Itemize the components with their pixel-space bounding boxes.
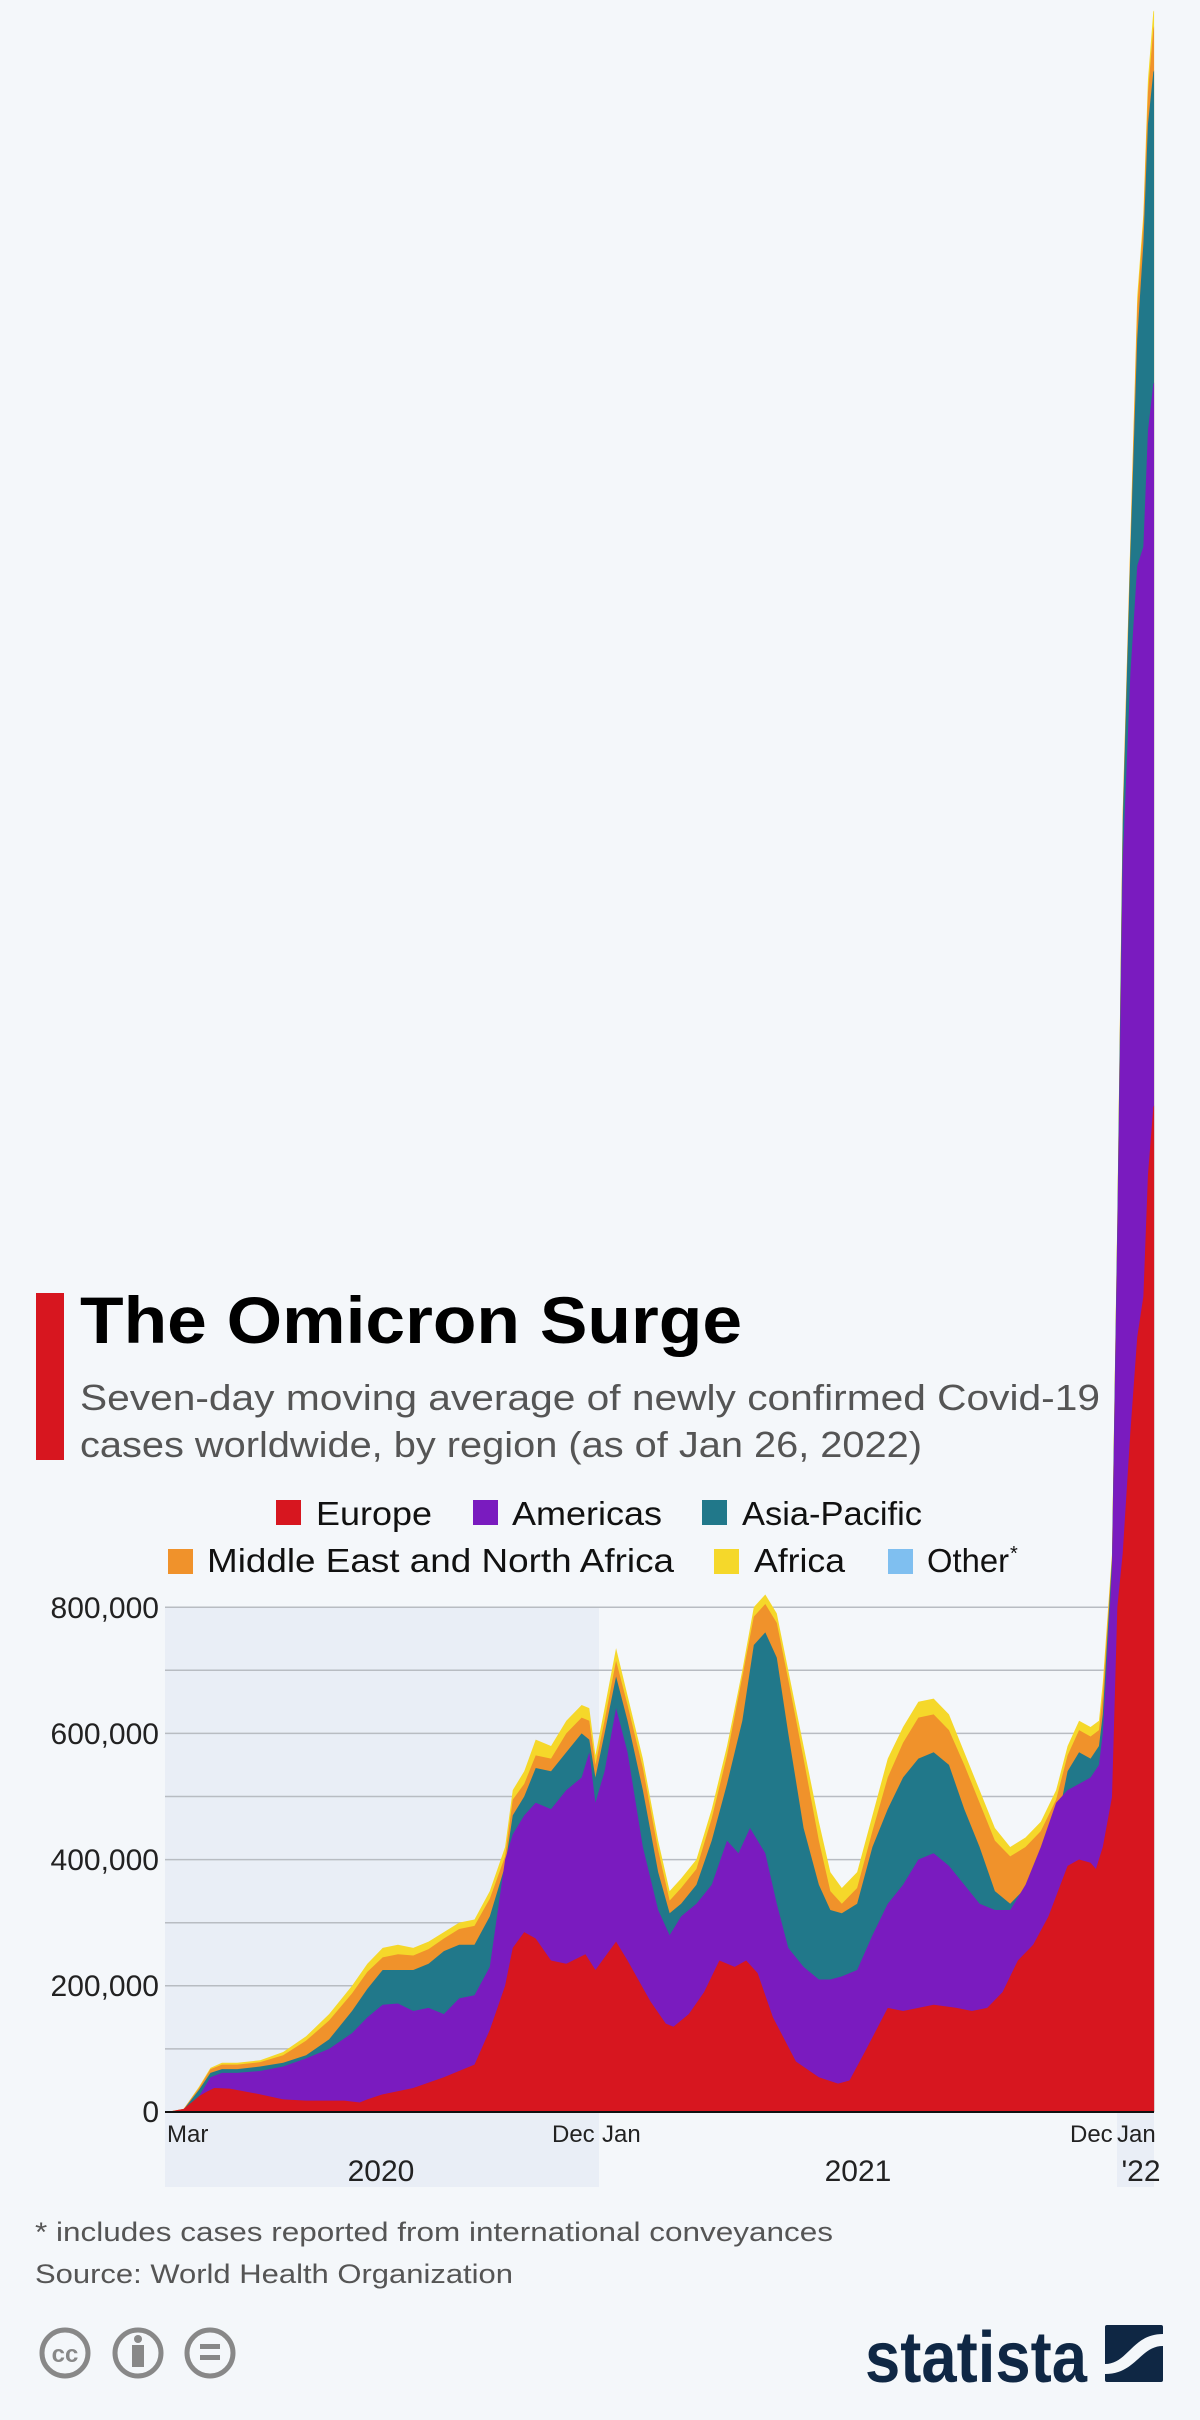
gridlines [165,1607,1154,2049]
y axis labels: 400,000 [51,1844,159,1877]
statista logo: statista [865,2318,1088,2398]
legend: * [1010,1543,1018,1565]
y axis labels [51,1592,159,2129]
year labels: 2020 [348,2155,414,2188]
y axis labels: 0 [142,2096,159,2129]
title accent bar [36,1293,64,1460]
area: Middle East and North Africa [167,26,1154,2112]
y axis labels: 600,000 [51,1718,159,1751]
area: Europe [167,1105,1154,2112]
shaded year bands [165,1607,599,2187]
source: Source: World Health Organization [35,2259,513,2289]
year labels: 2021 [825,2155,891,2188]
legend: Americas [512,1495,662,1532]
legend [168,1495,1018,1579]
title: The Omicron Surge [80,1283,742,1357]
area: Americas [167,383,1154,2112]
footnote: * includes cases reported from international conveyances [35,2217,833,2247]
year labels: '22 [1121,2155,1161,2188]
x axis labels: Jan [1117,2121,1156,2148]
stacked area chart [167,10,1154,2112]
x axis labels: Dec [1070,2121,1113,2148]
legend: Other [927,1542,1009,1579]
legend: Asia-Pacific [742,1495,922,1532]
x axis labels: Dec [552,2121,595,2148]
subtitle: Seven-day moving average of newly confirmed Covid-19 [80,1377,1100,1418]
y axis labels: 800,000 [51,1592,159,1625]
y axis labels: 200,000 [51,1970,159,2003]
year labels [348,2155,1161,2188]
subtitle: cases worldwide, by region (as of Jan 26, 2022) [80,1424,922,1465]
area: Africa [167,10,1154,2112]
icons: creative commons: cc [52,2341,78,2368]
x axis labels: Mar [167,2121,208,2148]
x axis labels [167,2121,1156,2148]
area: Asia-Pacific [167,70,1154,2112]
x axis labels: Jan [602,2121,641,2148]
legend: Africa [754,1542,846,1579]
legend: Europe [316,1495,432,1532]
baseline axis [165,2111,1154,2113]
legend: Middle East and North Africa [207,1542,675,1579]
subtitle [80,1377,1100,1465]
icons: creative commons [42,2330,233,2376]
